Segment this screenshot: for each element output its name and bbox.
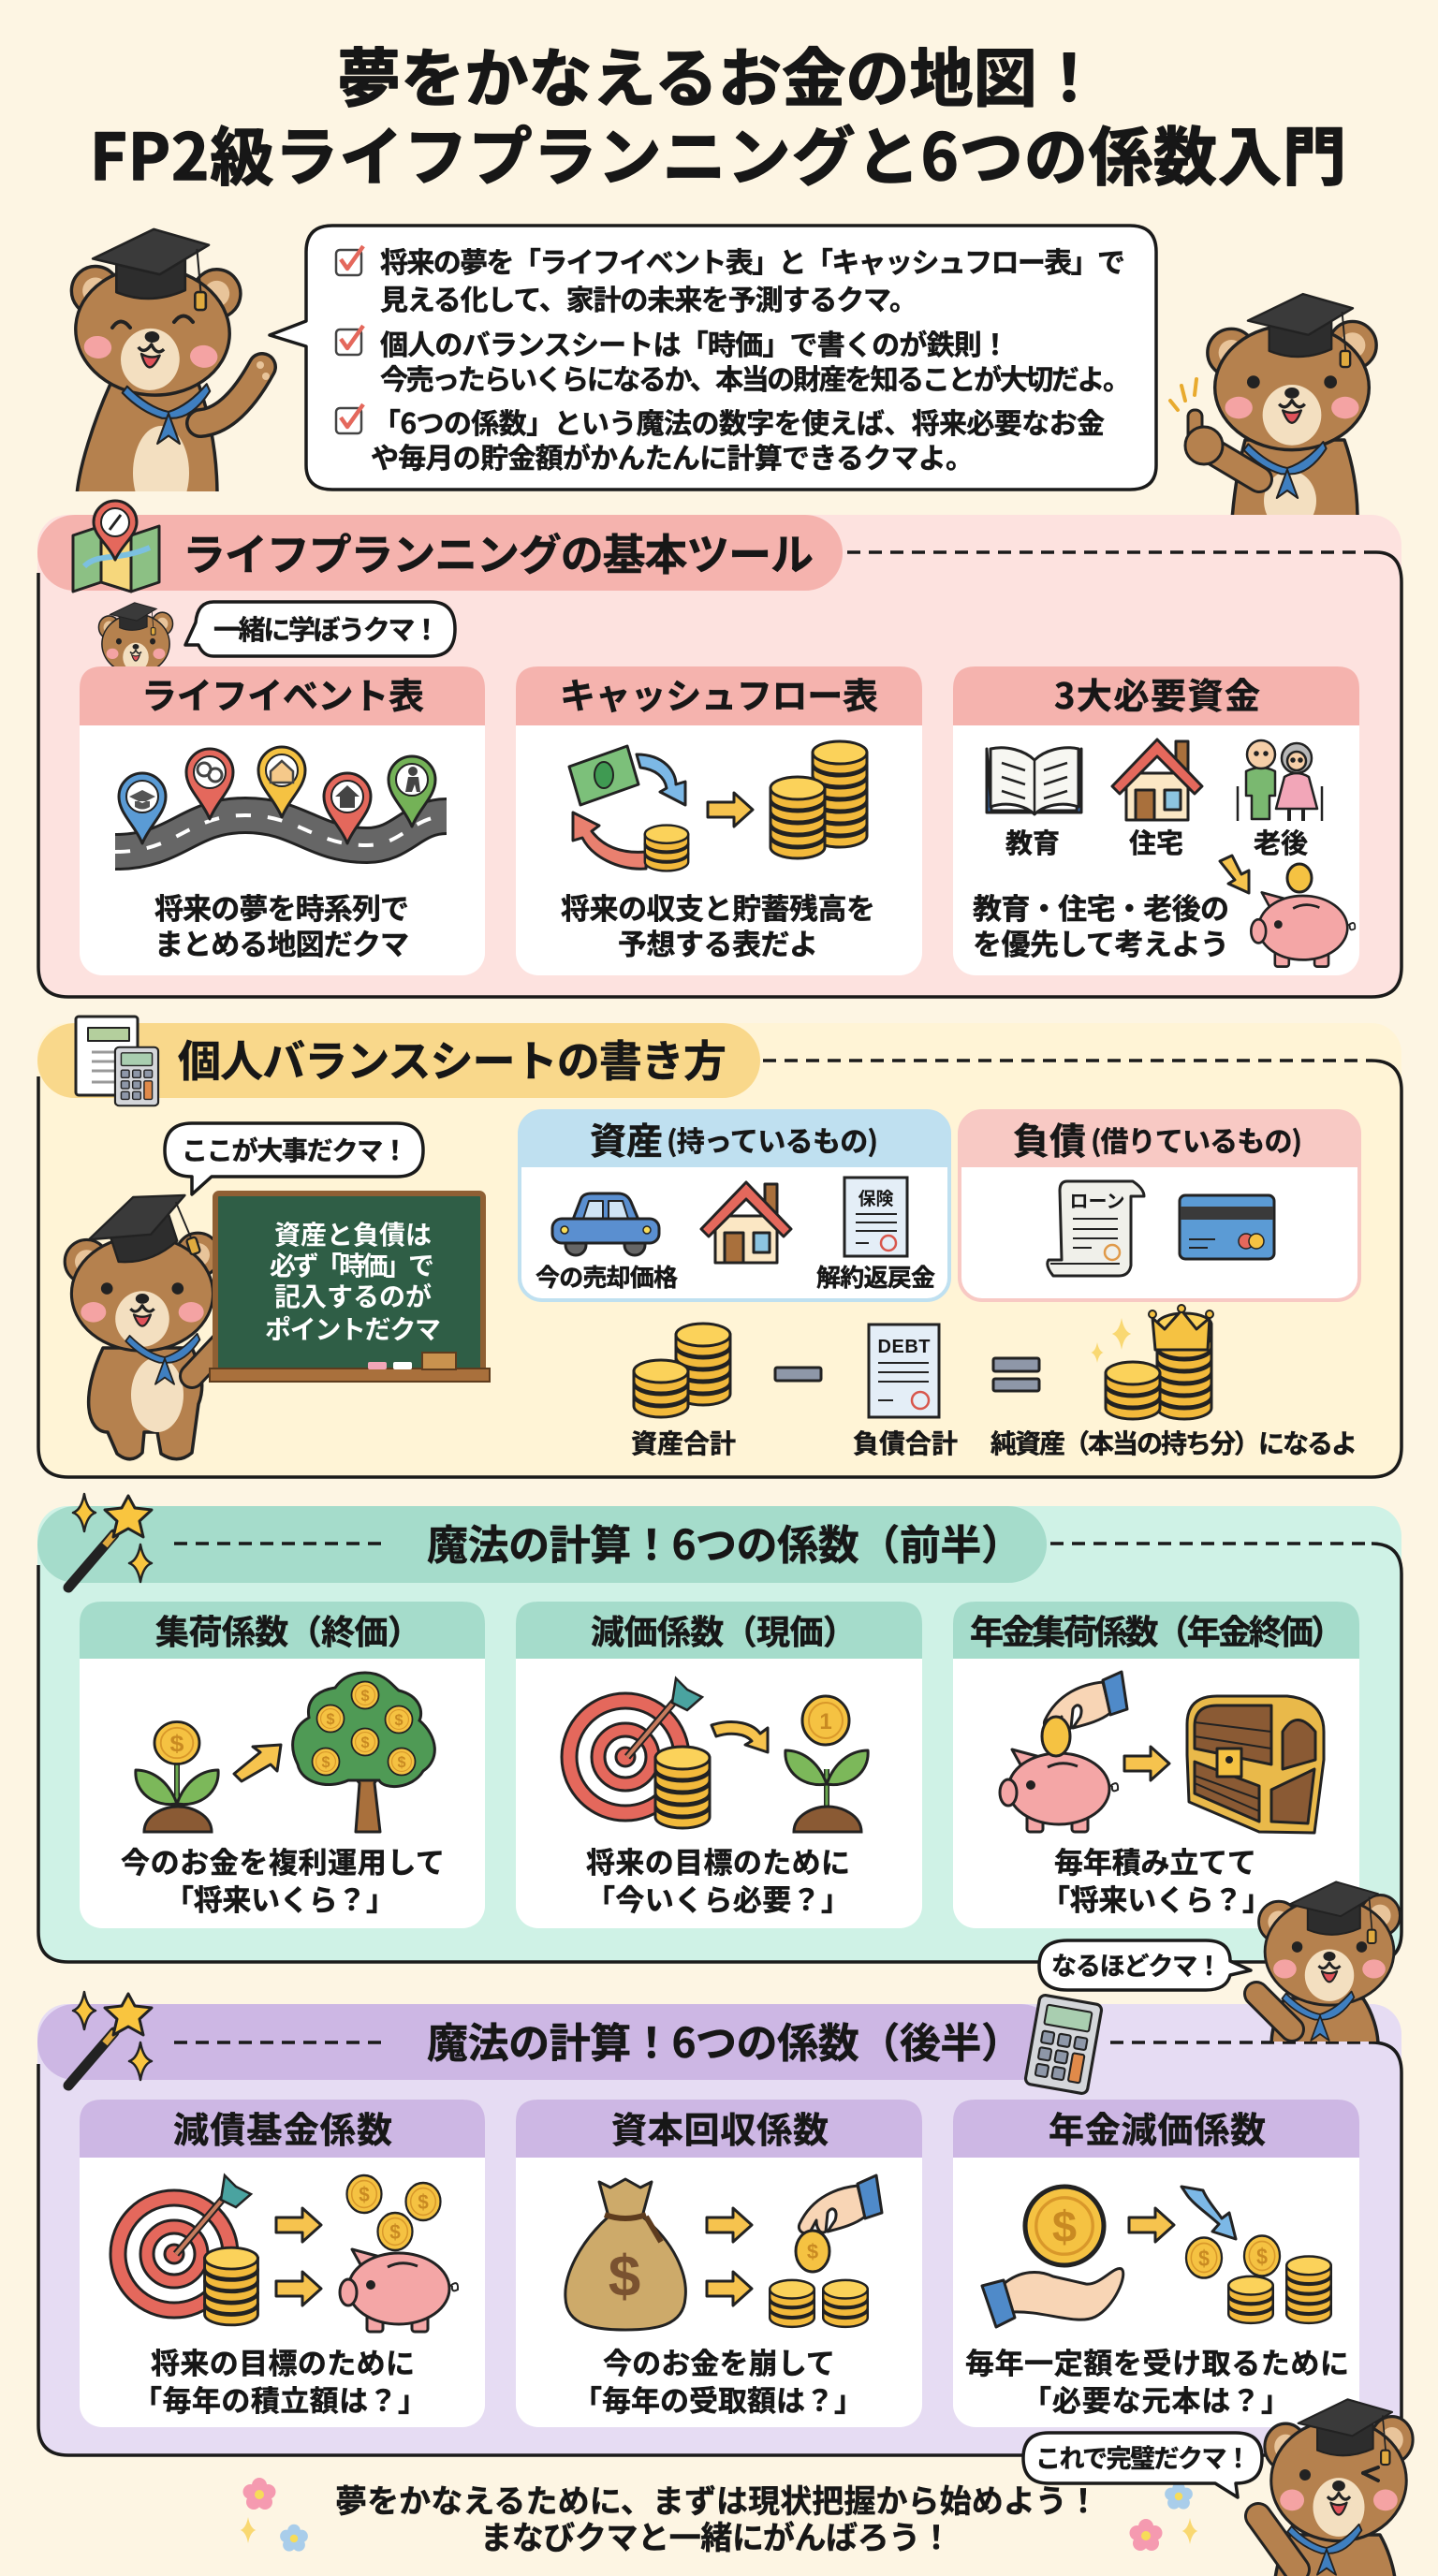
caption: 予想する表だよ — [618, 921, 818, 963]
heading: 個人バランスシートの書き方 — [178, 1028, 726, 1090]
card: annuity present value factor — [953, 2100, 1359, 2427]
point 2: 個人のバランスシートは「時価」で書くのが鉄則！ — [380, 322, 1009, 363]
chalkboard text: 記入するのが — [274, 1281, 432, 1311]
card: annuity future value factor — [953, 1602, 1359, 1928]
minus sign — [775, 1368, 821, 1381]
card heading: (借りているもの) — [1091, 1119, 1302, 1160]
equation labels: 資産合計 — [631, 1424, 736, 1461]
card heading: 年金集荷係数（年金終価） — [970, 1605, 1344, 1654]
card: life event table — [80, 666, 485, 975]
debt document: DEBT — [878, 1337, 931, 1357]
title: 夢をかなえるお金の地図！ — [337, 27, 1101, 120]
caption — [121, 1839, 445, 1919]
icon: coin in hand to declining coins — [982, 2187, 1331, 2327]
mascot: small bear — [98, 603, 173, 674]
chalkboard text: 資産と負債は — [274, 1221, 432, 1250]
icon: loan scroll: ローン — [1069, 1192, 1125, 1212]
chalkboard text: ポイントだクマ — [265, 1315, 441, 1344]
asset labels: 解約返戻金 — [816, 1259, 935, 1294]
caption: 「必要な元本は？」 — [1022, 2378, 1290, 2420]
panel: magic factors part 2 — [37, 1992, 1401, 2455]
point 1: 将来の夢を「ライフイベント表」と「キャッシュフロー表」で — [380, 240, 1125, 281]
icon: target to sprout: 1 — [819, 1709, 832, 1734]
labels: education, housing, retirement: 老後 — [1254, 822, 1308, 861]
point 2: 今売ったらいくらになるか、本当の財産を知ることが大切だよ。 — [380, 357, 1131, 398]
card: capital recovery factor — [516, 2100, 922, 2427]
chalkboard text: 必ず「時価」で — [270, 1251, 434, 1281]
mascot: waving bear top left — [63, 229, 270, 520]
asset coins — [634, 1324, 730, 1417]
title: FP2級ライフプランニングと6つの係数入門 — [90, 106, 1346, 198]
mascot: bear between panels — [1256, 1881, 1400, 2045]
caption: 今のお金を崩して — [603, 2340, 835, 2382]
panel: life planning basic tools — [37, 501, 1401, 997]
mascot: teacher bear — [65, 1182, 262, 1459]
icon: money bag to hand and coins — [565, 2175, 882, 2330]
equation: net assets — [631, 1305, 1357, 1461]
card: future value factor — [80, 1602, 485, 1928]
caption: を優先して考えよう — [973, 921, 1229, 963]
card heading: ライフイベント表 — [141, 667, 424, 719]
caption — [973, 886, 1229, 963]
coins with crown — [1091, 1305, 1213, 1419]
caption: まとめる地図だクマ — [154, 921, 409, 963]
icon: piggy bank to treasure chest — [1000, 1672, 1324, 1833]
caption: 将来の目標のために — [151, 2340, 415, 2382]
caption — [586, 1839, 850, 1919]
icon: open book — [987, 748, 1081, 814]
icon: target to sprout — [562, 1678, 868, 1832]
card: present value factor — [516, 1602, 922, 1928]
caption — [154, 886, 409, 963]
heading: ライフプランニングの基本ツール — [183, 521, 814, 583]
caption: 将来の目標のために — [586, 1839, 850, 1881]
point 1: 見える化して、家計の未来を予測するクマ。 — [380, 277, 917, 318]
caption — [573, 2340, 863, 2420]
card: sinking fund factor — [80, 2100, 485, 2427]
panel: magic factors part 1 — [37, 1494, 1401, 1962]
callout: let's learn together: 一緒に学ぼうクマ！ — [213, 608, 440, 648]
icon: money bag to hand and coins: $ — [609, 2245, 640, 2309]
caption — [561, 886, 875, 963]
icon: insurance document — [844, 1178, 907, 1256]
callout: now it's perfect: これで完璧だクマ！ — [1035, 2438, 1251, 2475]
card: assets — [520, 1111, 949, 1300]
icon: house — [1112, 739, 1202, 820]
card heading: (持っているもの) — [667, 1119, 878, 1160]
labels: education, housing, retirement: 住宅 — [1129, 822, 1183, 861]
caption: 「今いくら必要？」 — [586, 1877, 850, 1919]
heading: 魔法の計算！6つの係数（前半） — [427, 1512, 1022, 1572]
decoration: flowers and sparkles — [241, 2478, 1197, 2552]
icon: insurance document: 保険 — [858, 1189, 894, 1209]
equation labels: 負債合計 — [853, 1424, 958, 1461]
card heading: 負債 — [1013, 1113, 1086, 1165]
icon: car — [552, 1193, 659, 1255]
caption: 将来の収支と貯蓄残高を — [561, 886, 875, 928]
card heading: キャッシュフロー表 — [560, 667, 878, 719]
title — [90, 27, 1346, 198]
asset labels: 今の売却価格 — [536, 1259, 678, 1294]
equation labels — [631, 1424, 1357, 1461]
caption: 教育・住宅・老後の — [973, 886, 1229, 928]
callout: now it's perfect — [1023, 2433, 1262, 2497]
panel: personal balance sheet — [37, 1017, 1401, 1477]
card heading: 資本回収係数 — [611, 2101, 829, 2153]
card heading: 資産 — [590, 1113, 663, 1165]
asset labels — [536, 1259, 935, 1294]
icon: road with pins — [115, 747, 447, 852]
card: cash flow table — [516, 666, 922, 975]
caption — [965, 2340, 1349, 2420]
point 2 — [336, 322, 1131, 398]
callout: I see: なるほどクマ！ — [1051, 1946, 1222, 1983]
chalkboard — [210, 1193, 490, 1382]
caption: 「将来いくら？」 — [165, 1877, 395, 1919]
point 1 — [336, 240, 1125, 318]
debt document — [869, 1325, 939, 1417]
caption: 毎年一定額を受け取るために — [965, 2340, 1349, 2382]
caption: 将来の夢を時系列で — [154, 886, 409, 928]
caption — [1041, 1839, 1271, 1919]
caption: 毎年積み立てて — [1054, 1839, 1256, 1881]
callout: key points speech bubble — [270, 226, 1156, 490]
heading: 魔法の計算！6つの係数（後半） — [427, 2010, 1022, 2070]
labels: education, housing, retirement — [1005, 822, 1308, 861]
icon: magic wand — [68, 1494, 152, 1588]
icon: notebook and calculator — [76, 1017, 158, 1105]
icon: loan scroll — [1048, 1181, 1144, 1276]
caption: 「毎年の受取額は？」 — [573, 2378, 863, 2420]
point 3 — [336, 401, 1105, 476]
card heading: 集荷係数（終価） — [155, 1605, 421, 1654]
icon: map with compass pin — [73, 501, 159, 592]
point 3: 「6つの係数」という魔法の数字を使えば、将来必要なお金 — [373, 401, 1105, 442]
card heading: 年金減価係数 — [1049, 2101, 1266, 2153]
card heading: 減価係数（現価） — [591, 1605, 857, 1654]
icon: magic wand — [68, 1992, 152, 2086]
footer message: 夢をかなえるために、まずは現状把握から始めよう！ — [335, 2476, 1099, 2522]
equals sign — [993, 1358, 1039, 1391]
callout: let's learn together — [185, 602, 455, 656]
caption: 今のお金を複利運用して — [121, 1839, 445, 1881]
caption: 「将来いくら？」 — [1041, 1877, 1271, 1919]
footer message: まなびクマと一緒にがんばろう！ — [480, 2512, 952, 2558]
card heading: 3大必要資金 — [1054, 667, 1260, 719]
icon: coin sprout to money tree — [136, 1673, 434, 1832]
card: three major funds — [953, 666, 1359, 975]
icon: house — [701, 1182, 791, 1263]
footer message — [335, 2476, 1099, 2558]
icon: calculator — [1025, 1995, 1102, 2094]
icon: money bag to hand and coins: $ — [807, 2240, 818, 2263]
point 3: や毎月の貯金額がかんたんに計算できるクマよ。 — [371, 435, 974, 476]
mascot: thumbs-up bear top right — [1170, 294, 1376, 531]
icon: arrow to piggy bank — [1220, 856, 1355, 967]
labels: education, housing, retirement: 教育 — [1005, 822, 1060, 861]
icon: elderly couple — [1238, 740, 1322, 821]
caption: 「毎年の積立額は？」 — [133, 2378, 427, 2420]
mascot: winking bear bottom right — [1258, 2399, 1413, 2576]
card heading — [1013, 1113, 1302, 1165]
caption — [133, 2340, 427, 2420]
callout: this is important: ここが大事だクマ！ — [182, 1131, 408, 1168]
callout: I see — [1039, 1940, 1251, 1990]
icon: target to piggy bank — [110, 2175, 458, 2332]
callout: this is important — [165, 1123, 423, 1194]
card heading — [590, 1113, 878, 1165]
equation labels: 純資産（本当の持ち分）になるよ — [990, 1424, 1357, 1461]
icon: money cycle and coins — [569, 741, 867, 871]
card: liabilities — [960, 1111, 1359, 1300]
card heading: 減債基金係数 — [173, 2101, 392, 2153]
chalkboard text — [265, 1221, 441, 1344]
icon: credit card — [1180, 1195, 1274, 1259]
